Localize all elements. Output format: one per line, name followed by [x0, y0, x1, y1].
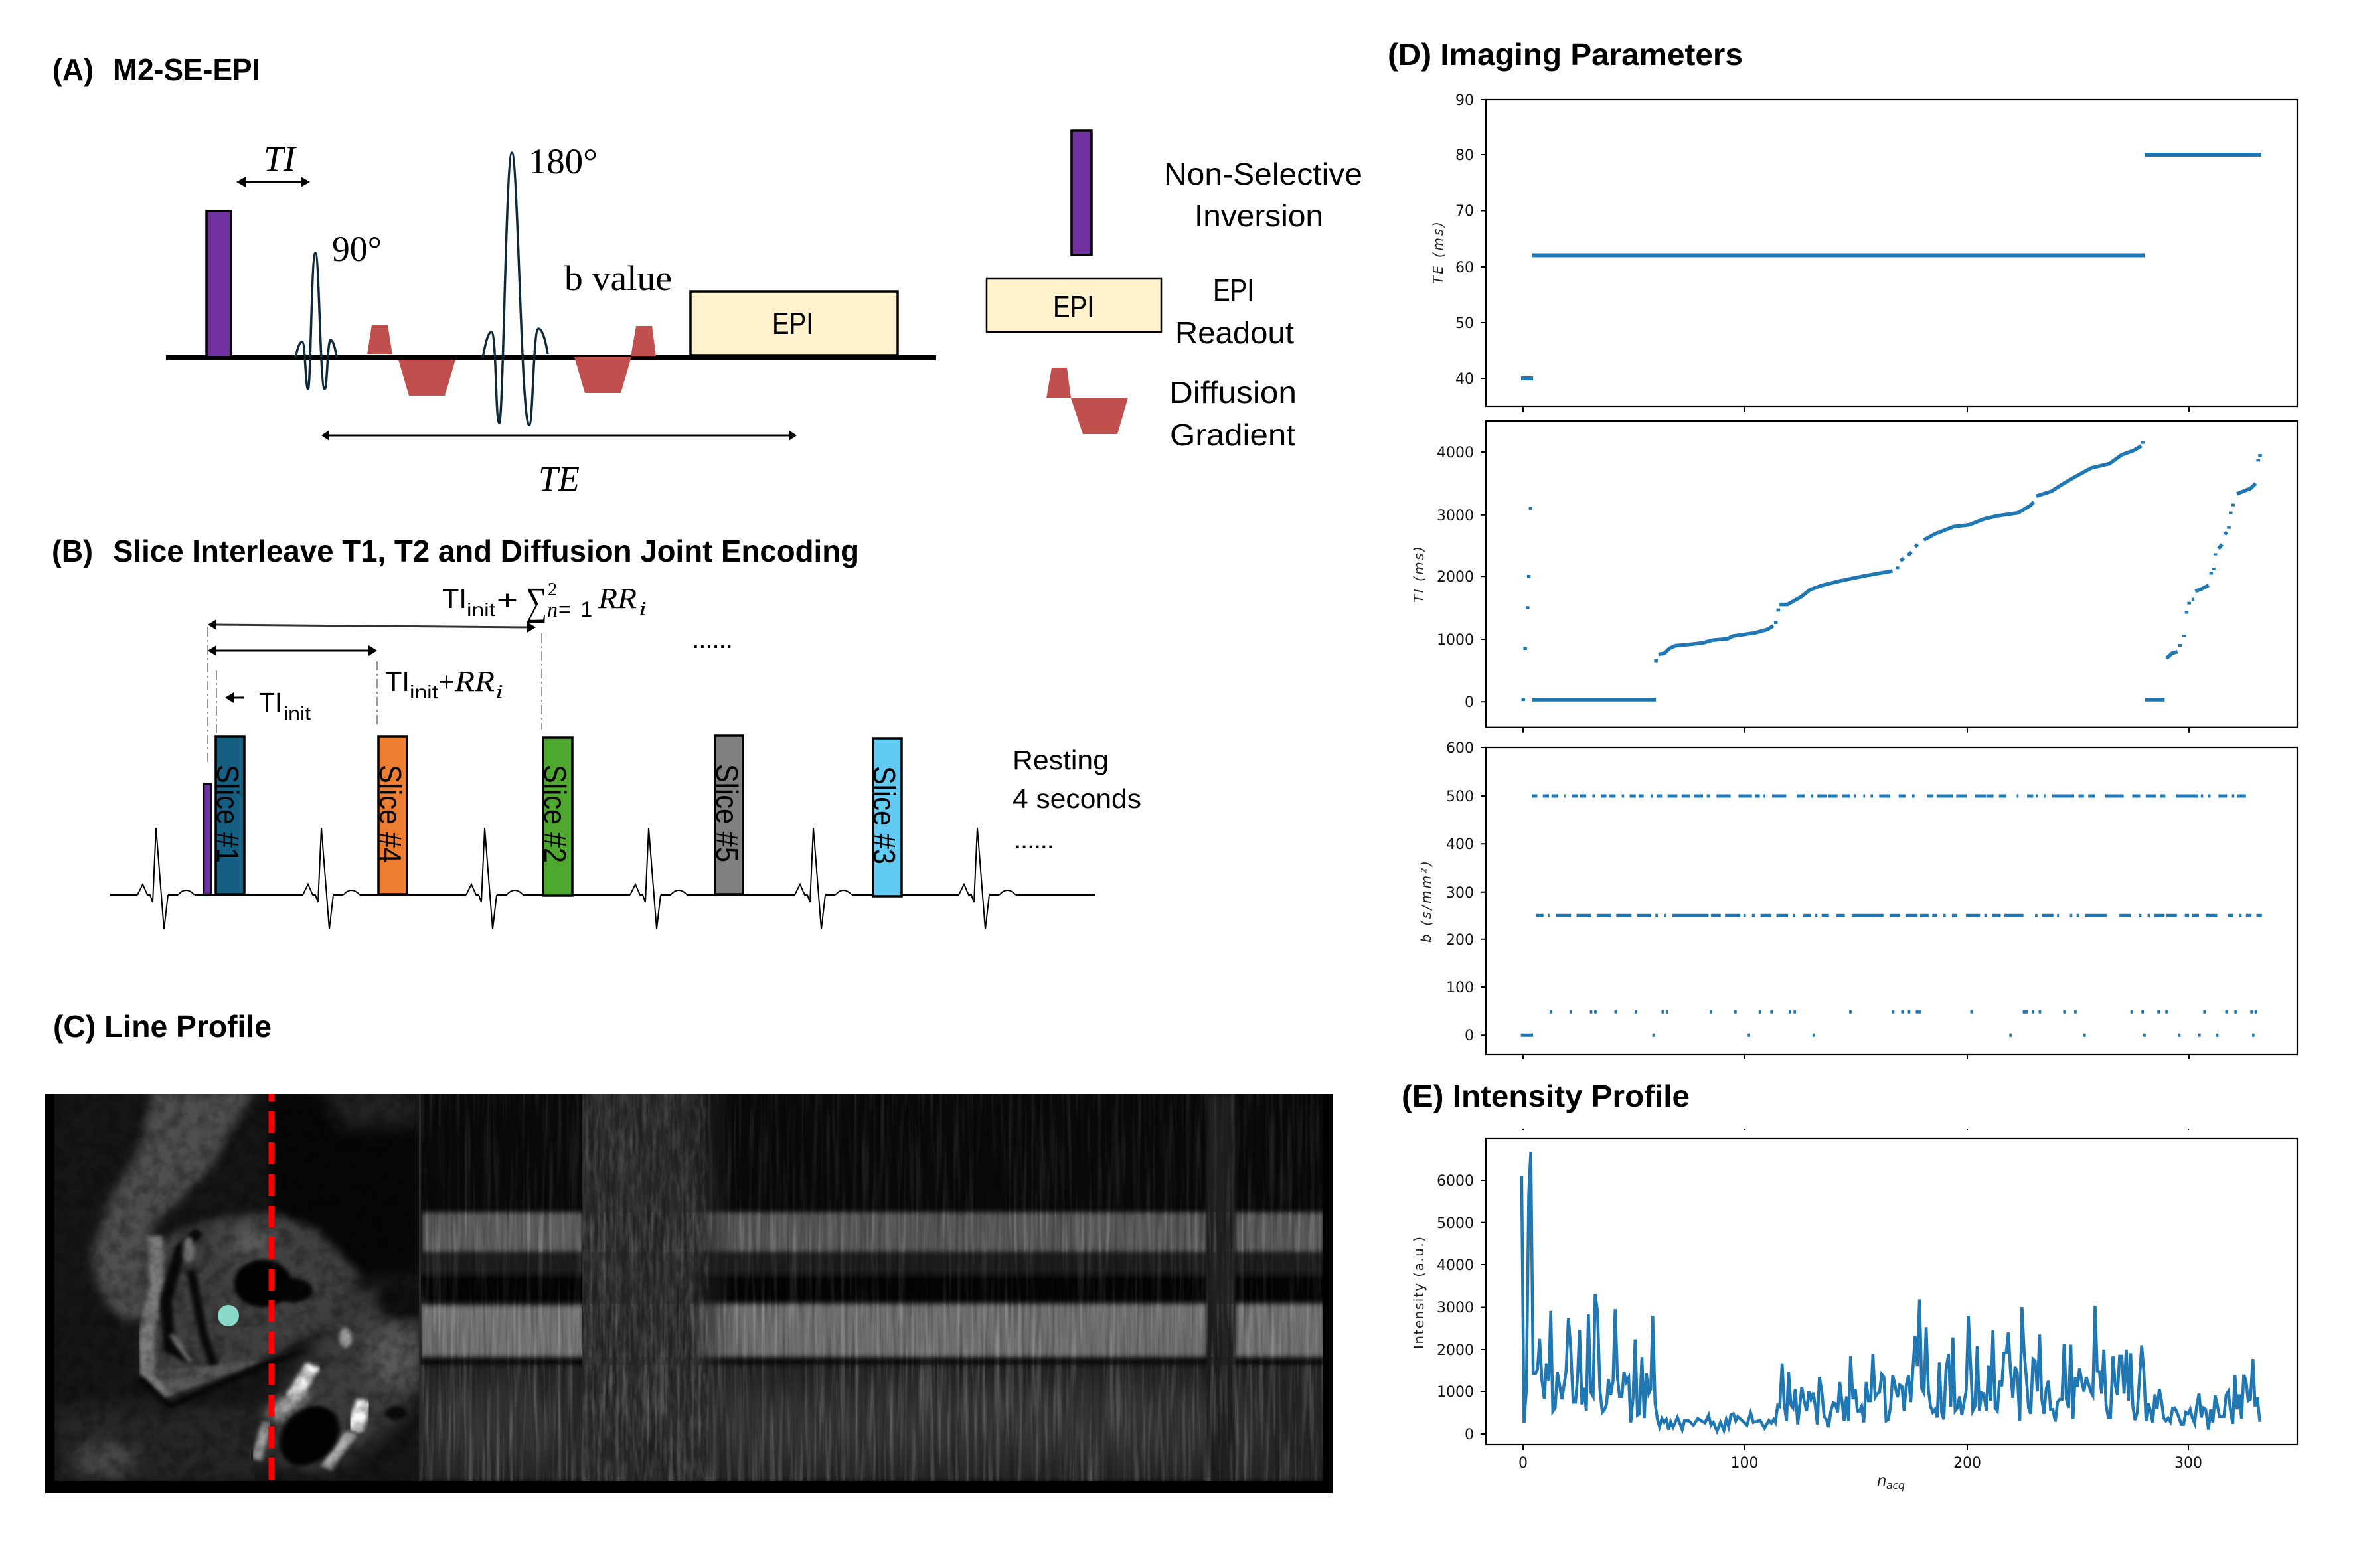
slice 3 bar — [867, 738, 902, 896]
timeline baseline — [166, 355, 936, 360]
legend: gradient label: Diffusion — [1169, 375, 1297, 410]
b value chart — [1418, 740, 2297, 1059]
legend: inversion label: Inversion — [1194, 198, 1323, 233]
intensity line chart: 0 — [1465, 1427, 1474, 1443]
legend: EPI label: Readout — [1175, 315, 1294, 350]
TI init plus RR label: init — [410, 682, 438, 702]
inversion pulse — [206, 211, 231, 357]
intensity line chart: 100 — [1730, 1455, 1758, 1472]
TI init plus RR label — [385, 665, 503, 702]
heading B: Slice Interleave T1, T2 and Diffusion Joint Encoding — [113, 534, 859, 568]
b value chart: 100 — [1446, 980, 1474, 996]
slice 1 bar: Slice #1 — [210, 765, 245, 863]
slice 4 bar — [373, 736, 408, 894]
180 degree label: 180° — [528, 141, 598, 181]
TE chart: 80 — [1455, 147, 1474, 164]
intensity line chart: 6000 — [1437, 1173, 1474, 1190]
intensity line chart: 200 — [1953, 1455, 1981, 1472]
legend: gradient label — [1169, 375, 1297, 452]
heading A — [52, 52, 260, 87]
resting note: 4 seconds — [1013, 783, 1141, 814]
intensity line chart: 4000 — [1437, 1257, 1474, 1274]
intensity line chart — [1411, 1138, 2297, 1492]
legend: inversion label: Non-Selective — [1164, 157, 1362, 191]
heading A: M2-SE-EPI — [113, 52, 260, 87]
panel A: M2-SE-EPI sequence diagram — [52, 52, 936, 499]
formula: TI init plus sum of RR — [442, 580, 647, 623]
continuation dots top: ...... — [692, 623, 733, 654]
TE chart: 50 — [1455, 315, 1474, 332]
TE interval arrow — [321, 430, 797, 441]
TE chart: 90 — [1455, 92, 1474, 109]
TE chart — [1430, 92, 2297, 412]
legend for sequence elements — [987, 131, 1362, 452]
legend: inversion icon — [1072, 131, 1092, 255]
diffusion gradients — [367, 325, 656, 396]
TE label: TE — [538, 459, 580, 499]
panel E: intensity profile — [1402, 1079, 2297, 1492]
legend: gradient icon — [1046, 368, 1128, 434]
TI interval arrow — [236, 177, 310, 187]
slice 2 bar: Slice #2 — [538, 765, 572, 863]
long interval arrow — [208, 619, 536, 633]
legend: EPI label — [1175, 273, 1294, 350]
TI init arrow — [225, 692, 244, 703]
formula: TI init plus sum of RR: =1 — [558, 597, 592, 621]
formula: TI init plus sum of RR: ∑ — [526, 580, 547, 623]
heading A: (A) — [52, 52, 94, 87]
formula: TI init plus sum of RR: TI — [442, 584, 467, 614]
b value label: b value — [564, 258, 672, 298]
b value chart: 200 — [1446, 932, 1474, 949]
legend: EPI label: EPI — [1213, 273, 1254, 307]
heading B: (B) — [52, 534, 93, 568]
TI chart: 3000 — [1437, 508, 1474, 524]
legend: EPI icon: EPI — [1053, 289, 1094, 324]
red dashed profile line — [268, 1094, 275, 1481]
slice 2 bar — [538, 738, 572, 896]
intensity line chart: Intensity (a.u.) — [1411, 1237, 1427, 1349]
b value chart: 400 — [1446, 836, 1474, 853]
panel B: slice interleave encoding — [52, 534, 1141, 929]
top tick remnants — [1523, 1129, 2188, 1130]
formula: TI init plus sum of RR: n — [547, 597, 558, 621]
guide lines — [208, 627, 542, 765]
formula: TI init plus sum of RR: + — [497, 585, 518, 615]
panel C: line profile — [45, 1009, 1333, 1493]
resting note: ...... — [1014, 824, 1054, 854]
legend: inversion label — [1164, 157, 1362, 233]
EPI readout box — [690, 291, 898, 356]
formula: TI init plus sum of RR: 2 — [548, 580, 557, 600]
kymograph line profile — [419, 1094, 1323, 1481]
TI chart: 2000 — [1437, 569, 1474, 586]
formula: TI init plus sum of RR: RR — [598, 582, 637, 615]
formula: TI init plus sum of RR: init — [467, 599, 495, 620]
b value chart: 600 — [1446, 740, 1474, 757]
TI init plus RR label: i — [495, 682, 503, 702]
TI init label: TI — [259, 687, 282, 718]
TE chart: 40 — [1455, 371, 1474, 388]
TE chart: 70 — [1455, 203, 1474, 220]
TI chart: TI (ms) — [1411, 546, 1427, 603]
intensity line chart: 0 — [1518, 1455, 1528, 1472]
formula: TI init plus sum of RR: i — [639, 599, 647, 619]
TE chart: TE (ms) — [1430, 222, 1446, 284]
intensity line chart: 5000 — [1437, 1215, 1474, 1232]
legend: gradient label: Gradient — [1170, 418, 1295, 452]
short interval arrow — [208, 645, 377, 656]
ECG trace — [110, 828, 1095, 929]
TI init label — [259, 687, 311, 724]
heading E: (E) Intensity Profile — [1402, 1079, 1690, 1113]
TI chart — [1411, 421, 2297, 733]
b value chart: 0 — [1465, 1028, 1474, 1044]
resting note: Resting — [1013, 745, 1109, 775]
b value chart: 300 — [1446, 885, 1474, 902]
TI init plus RR label: TI — [385, 666, 410, 697]
intensity line chart: 1000 — [1437, 1384, 1474, 1401]
image frame — [45, 1094, 1333, 1493]
ROI marker — [218, 1305, 239, 1326]
TI chart: 1000 — [1437, 632, 1474, 649]
intensity line chart: 2000 — [1437, 1342, 1474, 1359]
EPI readout box: EPI — [772, 306, 813, 341]
slice 5 bar: Slice #5 — [710, 764, 744, 862]
TI chart: 4000 — [1437, 445, 1474, 461]
TE chart: 60 — [1455, 260, 1474, 276]
intensity line chart: acq — [1886, 1479, 1905, 1492]
TI label: TI — [264, 139, 297, 179]
slice 5 bar — [710, 736, 744, 894]
intensity line chart: 300 — [2174, 1455, 2202, 1472]
heading D: (D) Imaging Parameters — [1388, 37, 1743, 72]
slice 1 bar — [210, 736, 245, 894]
TI init plus RR label: + — [438, 666, 455, 697]
heading C: (C) Line Profile — [53, 1009, 272, 1044]
intensity line chart: 3000 — [1437, 1300, 1474, 1316]
MRI cardiac image — [54, 1087, 424, 1481]
90 degree label: 90° — [332, 229, 382, 269]
intensity line chart: n — [1877, 1472, 1887, 1490]
slice 3 bar: Slice #3 — [867, 766, 902, 864]
TI init plus RR label: RR — [454, 665, 495, 698]
90 degree RF pulse — [295, 253, 337, 389]
TI chart: 0 — [1465, 694, 1474, 711]
slice 4 bar: Slice #4 — [373, 765, 408, 863]
resting note — [1013, 745, 1141, 854]
inversion marker — [204, 784, 211, 894]
TI init label: init — [284, 703, 311, 724]
b value chart: 500 — [1446, 789, 1474, 805]
panel D: imaging parameters — [1388, 37, 2297, 1059]
b value chart: b (s/mm²) — [1418, 861, 1434, 943]
180 degree RF pulse — [483, 153, 548, 425]
legend: EPI icon — [987, 279, 1161, 332]
